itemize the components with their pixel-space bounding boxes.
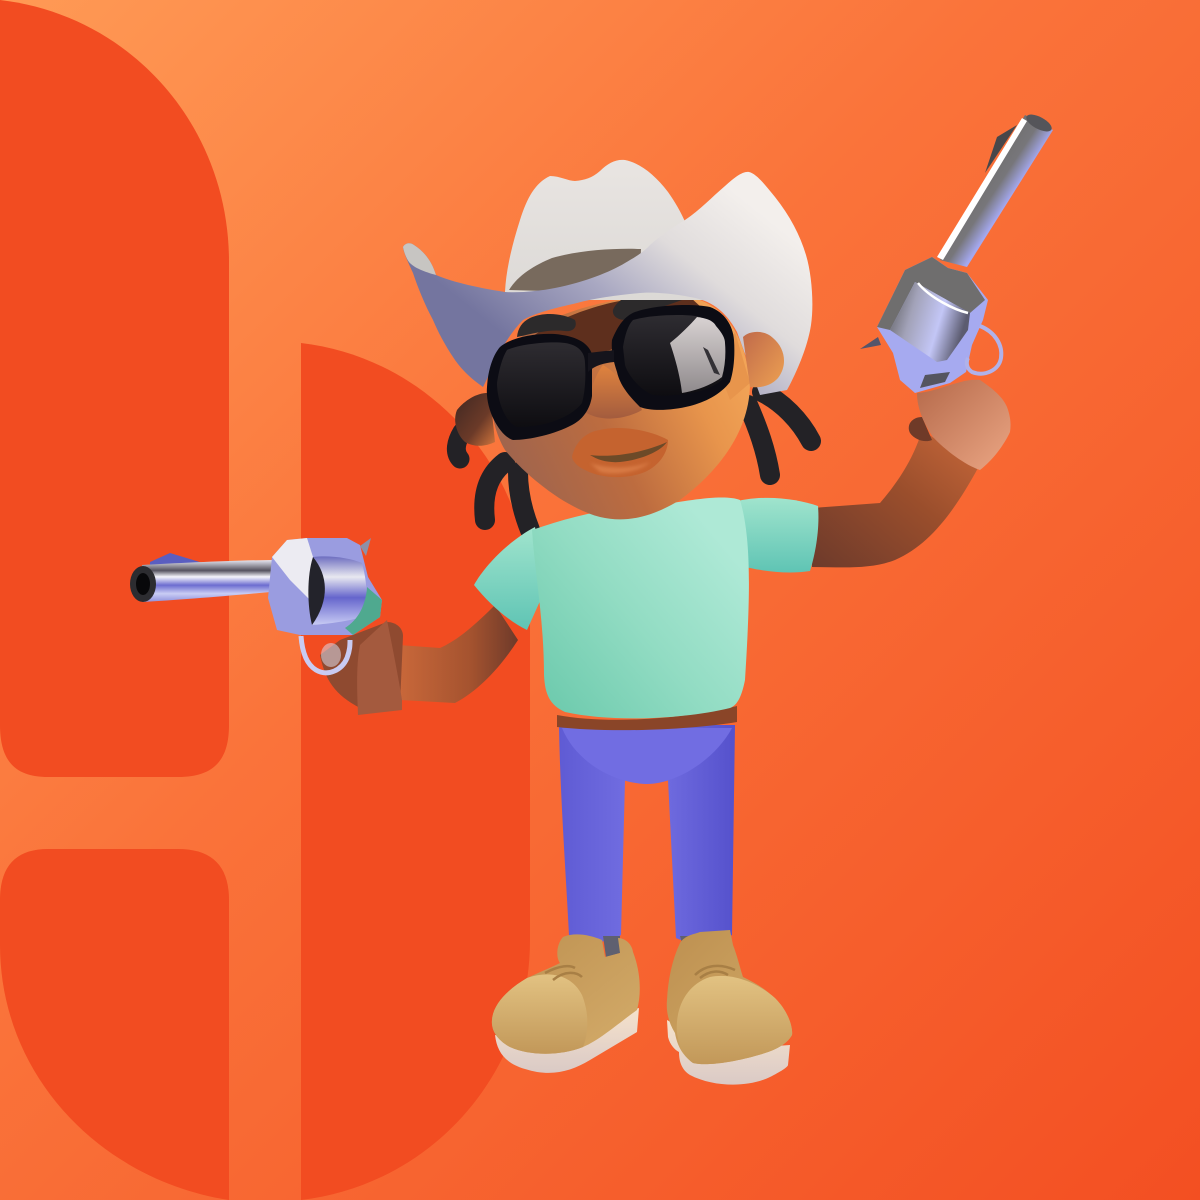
head: [491, 296, 750, 519]
hammer: [860, 337, 881, 349]
barrel: [142, 560, 292, 602]
mouth: [572, 428, 668, 477]
socks: [603, 936, 700, 957]
cylinder: [890, 282, 970, 362]
frame: [877, 257, 988, 393]
hammer: [360, 538, 371, 556]
left ear: [455, 393, 495, 446]
hat crown: [505, 160, 720, 300]
dreadlocks behind head: [456, 392, 811, 530]
background shape: upper left block: [0, 0, 229, 777]
right frame: [612, 305, 734, 410]
left lens: [497, 342, 585, 427]
sunglasses: [487, 305, 734, 440]
character: [130, 111, 1054, 1085]
background shape: centre block: [301, 343, 530, 1200]
nose: [585, 365, 642, 419]
hat brim inner flap: [403, 243, 436, 275]
muzzle: [130, 566, 156, 602]
left hand: [320, 622, 403, 708]
frame: [268, 538, 382, 635]
right arm: [812, 430, 978, 567]
hat brim: [403, 172, 812, 395]
front sight: [985, 125, 1017, 173]
right hand grip: [917, 380, 1011, 470]
eyebrows: [517, 293, 682, 337]
green reflection: [345, 587, 382, 635]
background shape: lower left block: [0, 849, 229, 1200]
hat band: [509, 249, 641, 292]
trigger guard: [967, 326, 1001, 374]
front sight: [150, 553, 203, 566]
right arm thumb: [909, 417, 932, 441]
side of face beside glasses: [715, 332, 750, 400]
left grip: [357, 620, 402, 715]
left frame: [487, 334, 592, 440]
right revolver: [860, 111, 1054, 393]
trigger guard: [301, 636, 350, 673]
left boot: [492, 934, 640, 1073]
right boot: [667, 930, 792, 1085]
belt: [557, 706, 737, 730]
legs: jeans: [559, 725, 735, 943]
shirt torso: [532, 497, 749, 718]
right ear: [743, 332, 784, 387]
barrel: [940, 115, 1053, 267]
forehead shade: [500, 296, 715, 380]
cylinder gap: [308, 557, 325, 625]
right sleeve: [730, 498, 818, 572]
bridge: [588, 350, 614, 372]
trigger guard opening: [321, 643, 341, 667]
lens highlight: [670, 317, 725, 393]
right lens: [623, 315, 725, 396]
lens glint: [703, 347, 720, 375]
left revolver: [130, 538, 382, 673]
left arm: [398, 605, 518, 703]
left sleeve: [474, 527, 545, 630]
cylinder: [312, 556, 366, 625]
